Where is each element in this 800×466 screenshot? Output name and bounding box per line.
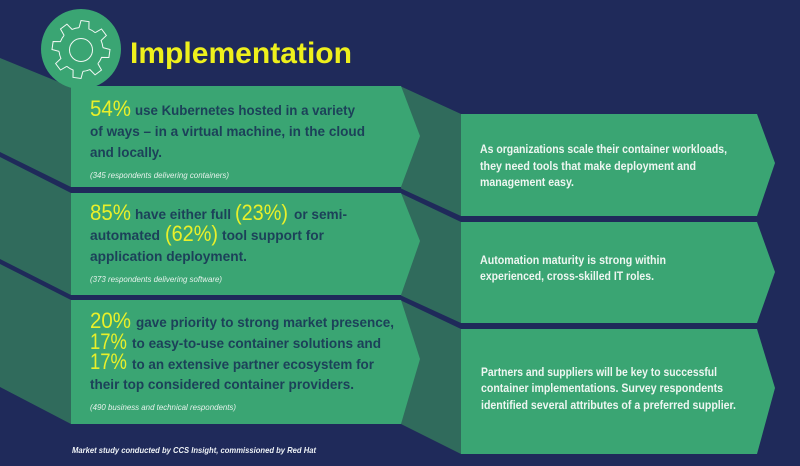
panel: tool support stat: application deployment. (90, 249, 247, 264)
panel: tool support stat: (62%) (165, 221, 218, 246)
panel: tool support stat: automated (90, 228, 160, 243)
footer source note: Market study conducted by CCS Insight, commissioned by Red Hat (72, 445, 317, 455)
panel: Kubernetes hosting stat: 54% (90, 96, 131, 121)
panel: provider priorities stat: gave priority to strong market presence, (136, 315, 394, 330)
left shaded ribbon (0, 58, 71, 424)
panel: tools insight: management easy. (480, 177, 574, 189)
panel: tool support stat (71, 193, 420, 295)
panel: tool support stat: have either full (135, 207, 231, 222)
panel: provider priorities stat: 17% (90, 329, 127, 354)
panel: automation insight: experienced, cross-skilled IT roles. (480, 271, 654, 283)
panel: partners insight: Partners and suppliers will be key to successful (481, 367, 717, 379)
panel: partners insight (461, 329, 775, 454)
panel: provider priorities stat (71, 300, 420, 424)
panel: tools insight: As organizations scale their container workloads, (480, 144, 727, 156)
panel: provider priorities stat: to an extensive partner ecosystem for (132, 357, 375, 372)
panel: provider priorities stat: to easy-to-use container solutions and (132, 336, 381, 351)
panel: tools insight: they need tools that make deployment and (480, 161, 696, 173)
panel: tool support stat: (23%) (235, 200, 288, 225)
panel: Kubernetes hosting stat: use Kubernetes hosted in a variety (135, 103, 355, 118)
panel: automation insight: Automation maturity is strong within (480, 255, 666, 267)
panel: tool support stat: or semi- (294, 207, 347, 222)
panel: provider priorities stat: 17% (90, 349, 127, 374)
panel: Kubernetes hosting stat: (345 respondents delivering containers) (90, 171, 229, 180)
title: Implementation (130, 37, 352, 70)
panel: tool support stat: tool support for (222, 228, 325, 243)
panel: provider priorities stat: (490 business and technical respondents) (90, 403, 236, 412)
panel: automation insight (461, 222, 775, 323)
panel: tool support stat: (373 respondents delivering software) (90, 275, 222, 284)
panel: provider priorities stat: 20% (90, 308, 131, 333)
panel: Kubernetes hosting stat: of ways – in a virtual machine, in the cloud (90, 124, 365, 139)
panel: provider priorities stat: their top considered container providers. (90, 377, 354, 392)
panel: partners insight: container implementations. Survey respondents (481, 383, 723, 395)
panel: Kubernetes hosting stat (71, 86, 420, 187)
panel: Kubernetes hosting stat: and locally. (90, 145, 162, 160)
middle shaded ribbon (400, 86, 461, 454)
panel: tool support stat: 85% (90, 200, 131, 225)
panel: partners insight: identified several attributes of a preferred supplier. (481, 400, 736, 412)
header icon: gear in circle (41, 9, 121, 89)
panel: tools insight (461, 114, 775, 216)
